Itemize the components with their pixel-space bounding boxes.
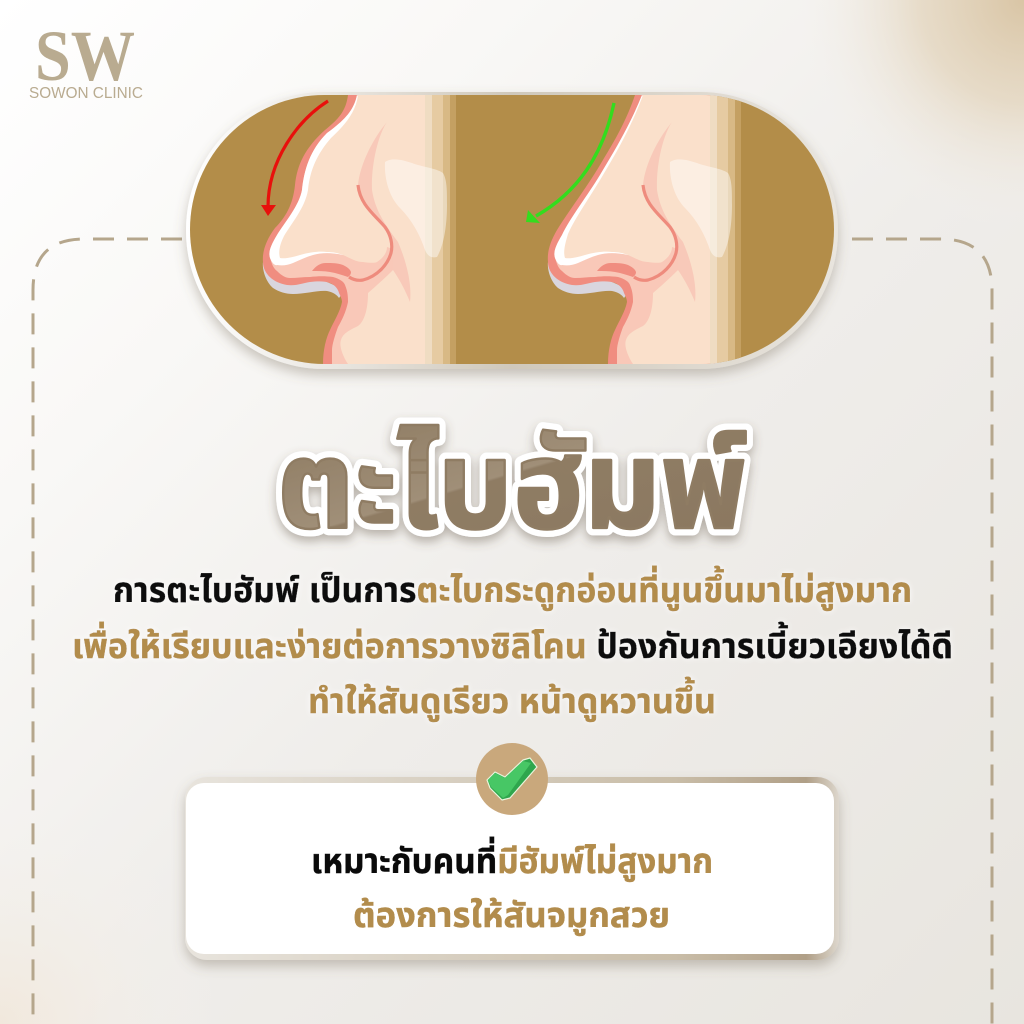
text block: description <box>72 565 953 722</box>
title: ตะไบฮัมพ์ <box>277 417 747 555</box>
panel: nose comparison capsule <box>186 92 838 369</box>
icon: check mark badge <box>476 743 548 815</box>
panel: suitability card <box>185 777 839 960</box>
arrow: green straight down <box>526 103 614 223</box>
text block: description: เพื่อให้เรียบและง่ายต่อการวางซิลิโคน ป้องกันการเบี้ยวเอียงได้ดี <box>72 621 953 666</box>
dashed frame <box>33 239 992 1024</box>
text block: description: การตะไบฮัมพ์ เป็นการตะไบกระดูกอ่อนที่นูนขึ้นมาไม่สูงมาก <box>113 565 912 611</box>
logo: Sowon Clinic: SW <box>35 16 135 96</box>
text: suitable for <box>311 836 713 936</box>
arrow: red curved down <box>261 101 328 216</box>
nose after surgery smoothed <box>548 95 741 364</box>
text block: description: ทำให้สันดูเรียว หน้าดูหวานขึ้น <box>308 676 716 722</box>
logo: Sowon Clinic: SOWON CLINIC <box>29 85 143 102</box>
text: suitable for: เหมาะกับคนที่มีฮัมพ์ไม่สูงมาก <box>311 836 713 882</box>
nose before surgery with bump <box>263 95 456 364</box>
title: ตะไบฮัมพ์ <box>277 417 747 555</box>
text: suitable for: ต้องการให้สันจมูกสวย <box>353 896 670 936</box>
